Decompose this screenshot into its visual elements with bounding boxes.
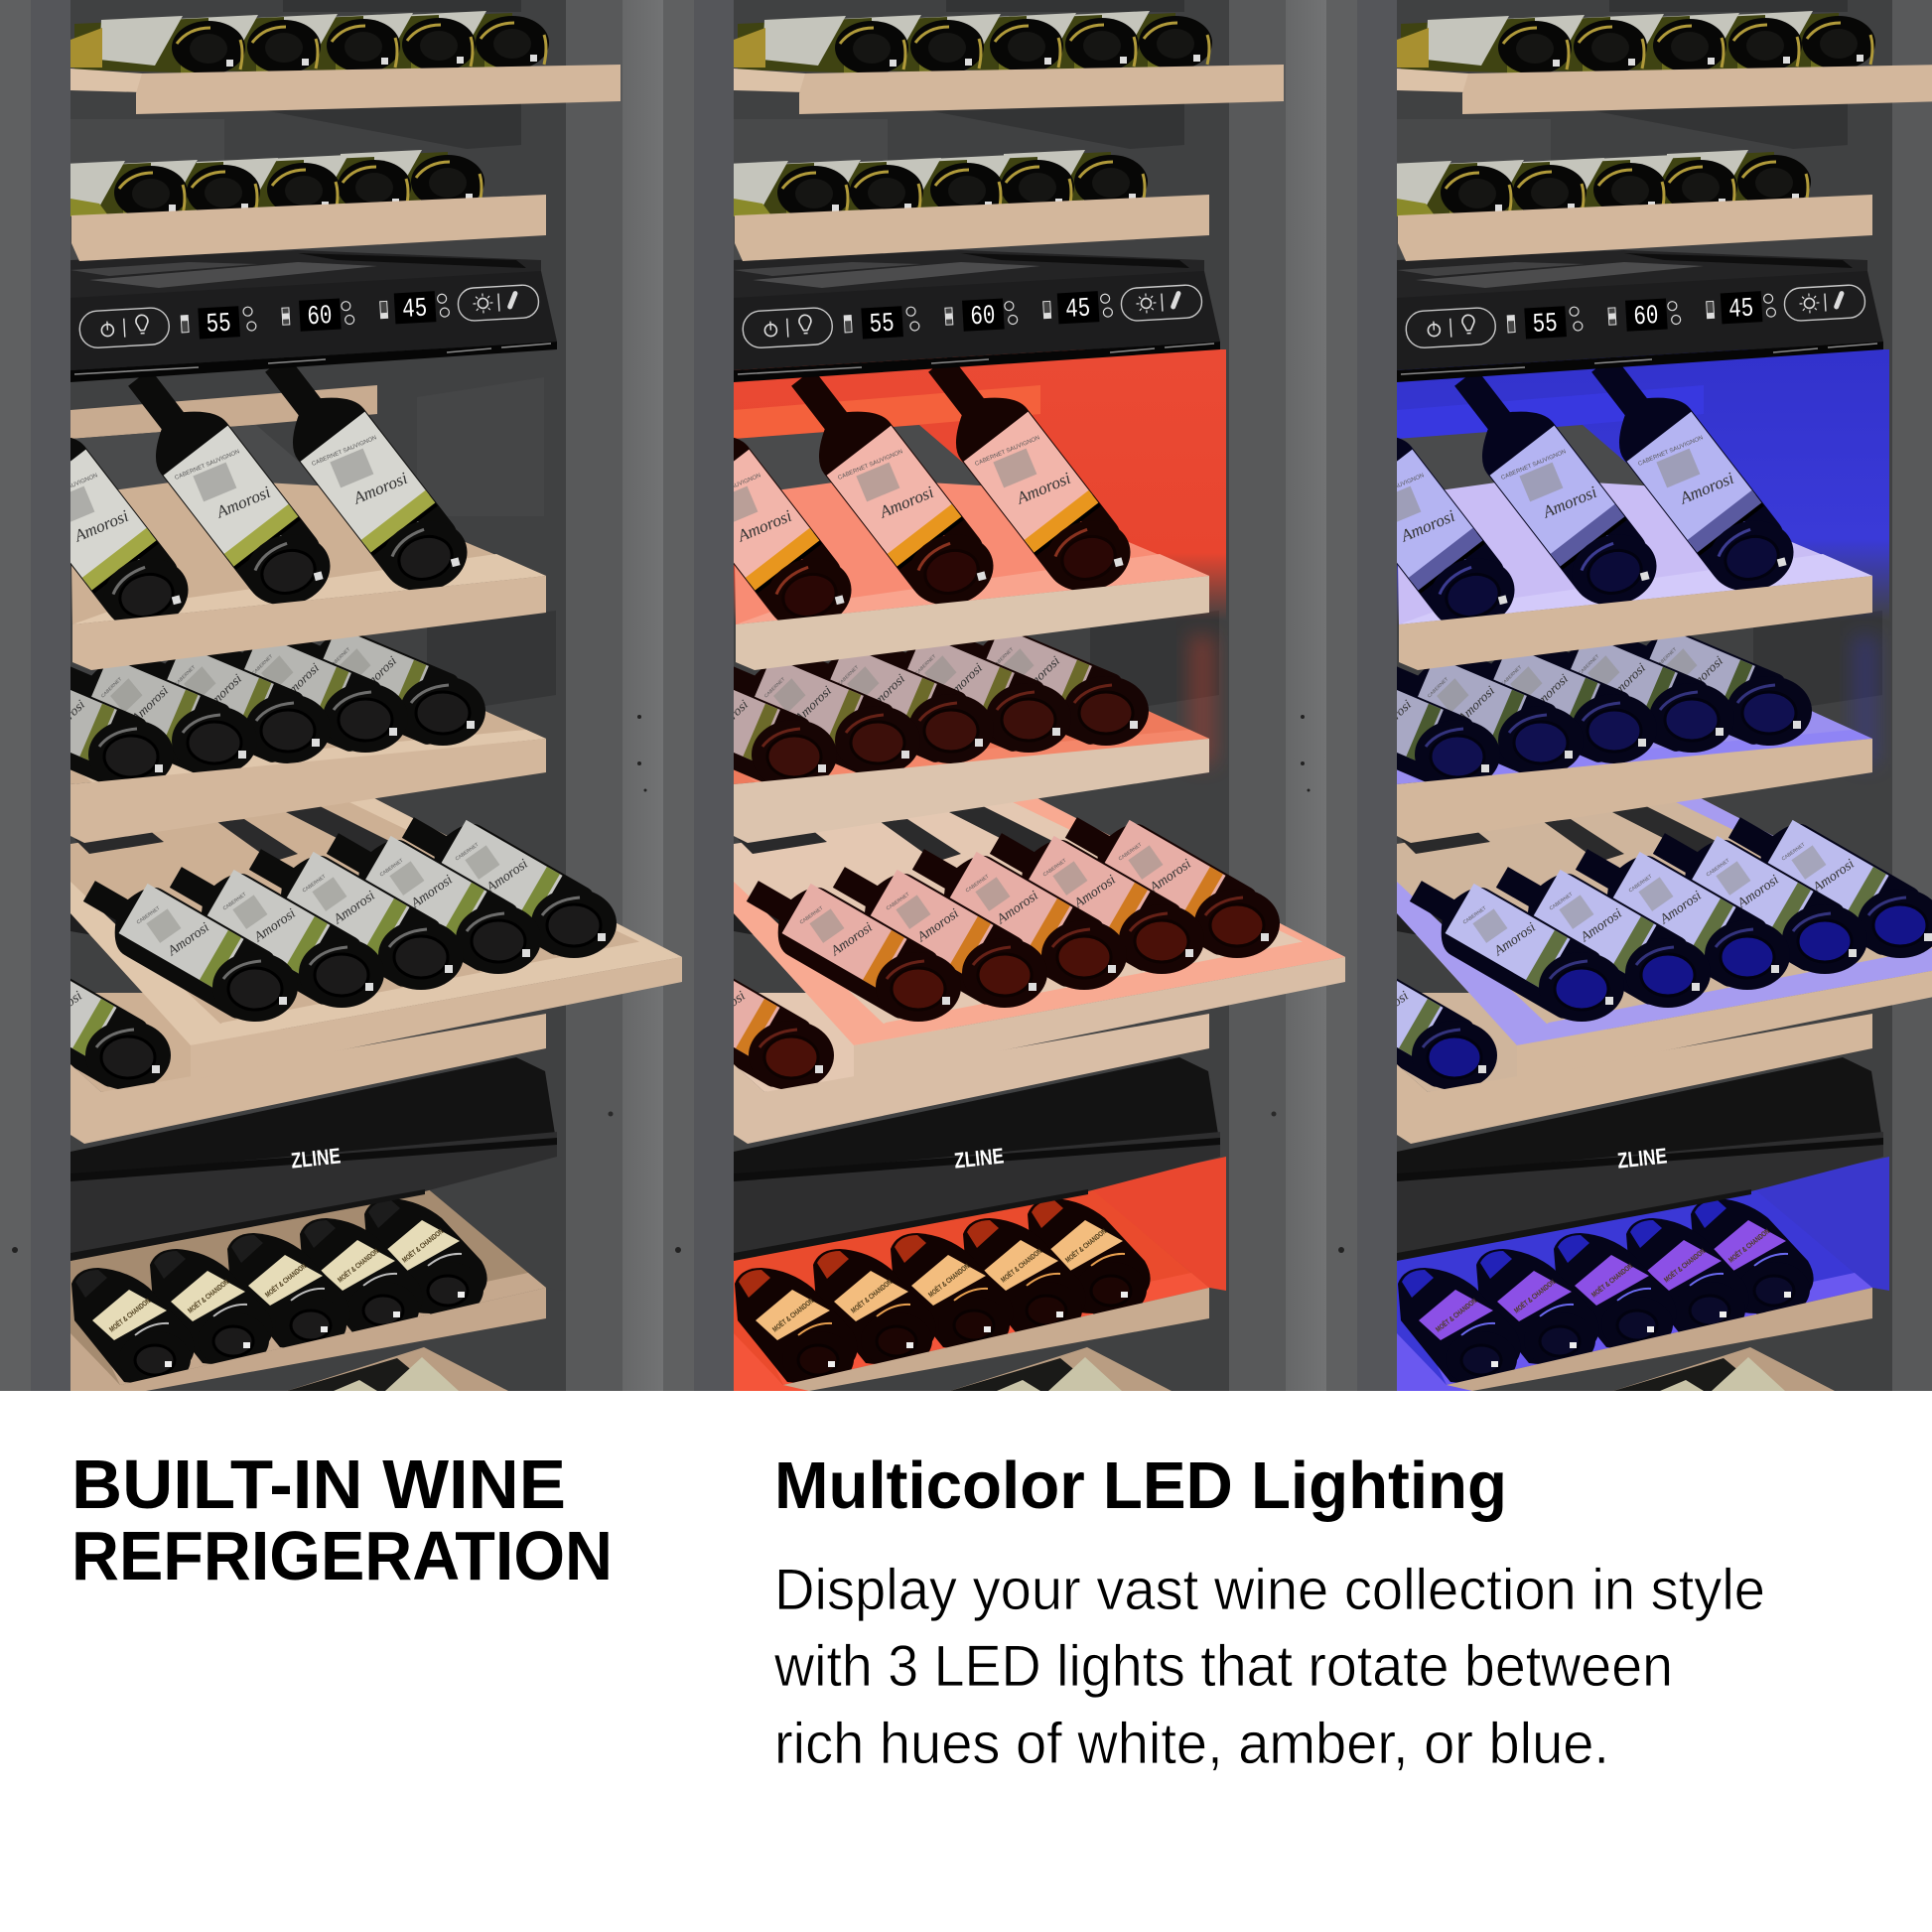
ZLINE fascia [1397,1057,1883,1261]
bottom shelf edge [950,1347,1172,1391]
cabinet interior [1397,0,1932,1391]
subheading: multicolor LED lighting: Multicolor LED Lighting [774,1449,1507,1523]
shelf with single bottle [607,927,1209,1144]
cabinet interior [70,0,663,1391]
second bottle shelf [680,150,1209,261]
control panel [70,250,557,382]
body text: rich hues of white, amber, or blue. [774,1712,1609,1776]
lower bottle rows [70,1157,563,1391]
left cabinet strips [1326,0,1397,1391]
top bottle shelf [1397,11,1932,114]
body text: with 3 LED lights that rotate between [773,1634,1673,1699]
body text [773,1558,1765,1776]
pull-out shelf [1397,795,1932,1080]
footer background [0,1391,1932,1932]
top bottle shelf [70,11,621,114]
pull-out shelf [70,795,682,1080]
cabinet interior [734,0,1326,1391]
shelf with single bottle [1270,927,1872,1144]
heading: built-in wine refrigeration [71,1446,613,1594]
faint lower wall glow [1853,635,1878,764]
panel: white lighting [0,0,682,1391]
lying bottles shelf [0,609,546,843]
amber wall glow [734,349,1226,621]
heading: built-in wine refrigeration: REFRIGERATION [71,1517,613,1594]
panel: amber lighting [607,0,1345,1391]
ZLINE fascia [70,1057,557,1261]
left cabinet strips [663,0,734,1391]
blue wall glow [1397,349,1889,621]
lying bottles shelf [621,609,1209,843]
second bottle shelf [17,150,546,261]
heading: built-in wine refrigeration: BUILT-IN WINE [71,1446,566,1523]
ZLINE fascia [734,1057,1220,1261]
control panel [1397,250,1883,382]
lower bottle rows [734,1157,1226,1391]
left cabinet strips [0,0,70,1391]
panel: blue lighting [1270,0,1932,1391]
shelf with single bottle [0,927,546,1144]
tilted bottles shelf [0,338,546,670]
control panel [734,250,1220,382]
bottom shelf edge [1613,1347,1835,1391]
top bottle shelf [734,11,1284,114]
tilted bottles shelf [1291,338,1872,670]
tilted bottles shelf [627,338,1209,670]
lying bottles shelf [1284,609,1872,843]
bottom shelf edge [287,1347,508,1391]
body text: Display your vast wine collection in style [774,1558,1765,1622]
pull-out shelf [734,795,1345,1080]
faint lower wall glow [1189,635,1215,764]
lower bottle rows [1397,1157,1889,1391]
second bottle shelf [1343,150,1872,261]
